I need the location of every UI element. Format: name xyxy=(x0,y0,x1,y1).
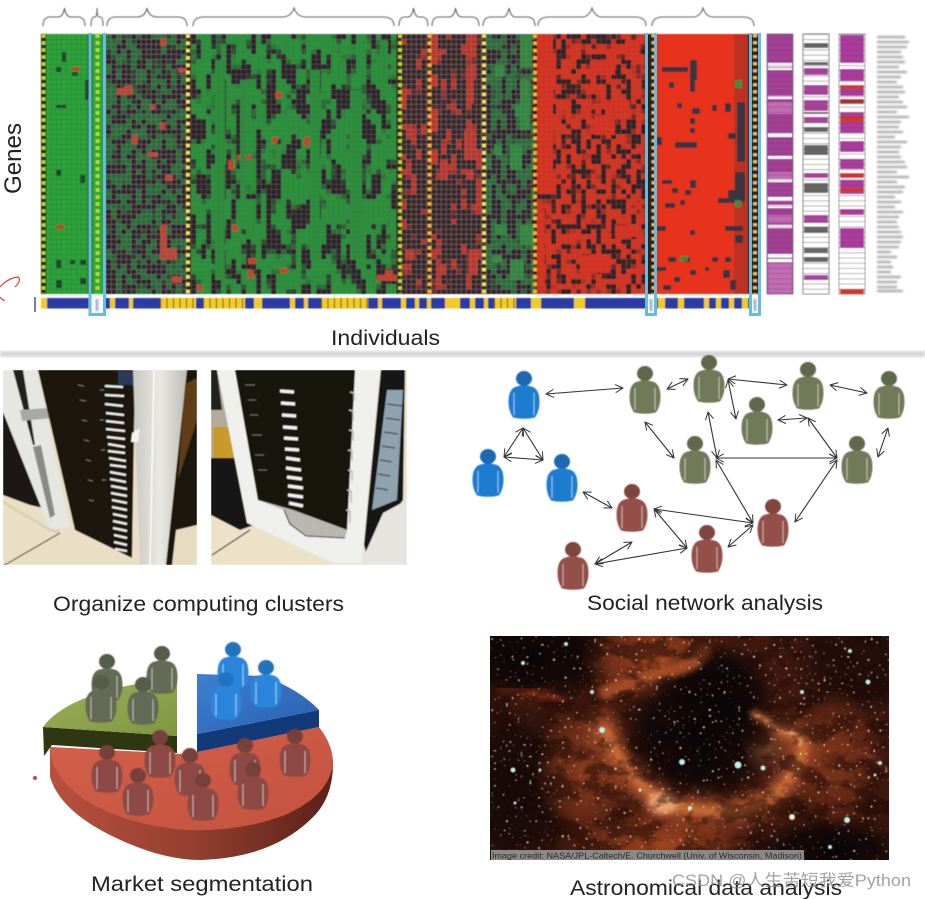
annotation column: third xyxy=(839,34,865,294)
panel: social network xyxy=(472,355,904,615)
sample marker columns xyxy=(44,34,755,294)
annotation column: first xyxy=(767,34,793,294)
green pie slice xyxy=(43,678,177,756)
image credit strip: Image credit: NASA/JPL-Caltech/E. Churchwell (Univ. of Wisconsin, Madison) xyxy=(492,850,802,860)
gene name labels xyxy=(877,37,909,291)
watermark: CSDN @人生苦短我爱Python xyxy=(672,871,911,890)
panel: gene expression heatmap xyxy=(0,8,909,350)
red pen scribble xyxy=(0,277,19,300)
green block dark spots xyxy=(56,52,88,288)
tiny faint axis marks xyxy=(74,319,786,321)
grid lines xyxy=(106,34,187,294)
small mark xyxy=(34,297,36,312)
olive group people xyxy=(630,355,904,484)
slide edge shadow xyxy=(0,351,925,357)
green highlight patches in mixed clusters xyxy=(215,34,534,280)
x axis label: Individuals: Individuals xyxy=(331,327,440,350)
panel: astronomical data xyxy=(490,636,889,899)
caption: Social network analysis: Social network analysis xyxy=(587,592,823,615)
caption: Organize computing clusters: Organize computing clusters xyxy=(53,593,344,616)
panel: market segmentation pie xyxy=(33,642,333,896)
stray red dot xyxy=(33,776,37,780)
photo: server rack left xyxy=(3,370,197,566)
red pie slice xyxy=(50,727,333,860)
olive market people xyxy=(86,646,178,725)
network arrows xyxy=(504,379,888,564)
individuals colour bar xyxy=(41,297,760,315)
photo: server rack right xyxy=(211,370,407,565)
annotation column: second xyxy=(803,34,829,294)
red group people xyxy=(558,484,788,590)
y axis label: Genes: Genes xyxy=(0,123,27,194)
caption: Market segmentation: Market segmentation xyxy=(91,873,313,896)
panel: computing clusters xyxy=(3,370,407,616)
heatmap cells xyxy=(41,34,760,294)
blue pie slice xyxy=(197,674,319,752)
blue group people xyxy=(472,371,578,502)
red market people xyxy=(92,729,310,821)
nebula image xyxy=(490,636,889,860)
blue market people xyxy=(210,642,282,720)
cluster brackets xyxy=(43,8,754,26)
highlighted outlier columns xyxy=(90,33,760,314)
red block dark spots xyxy=(656,60,745,290)
